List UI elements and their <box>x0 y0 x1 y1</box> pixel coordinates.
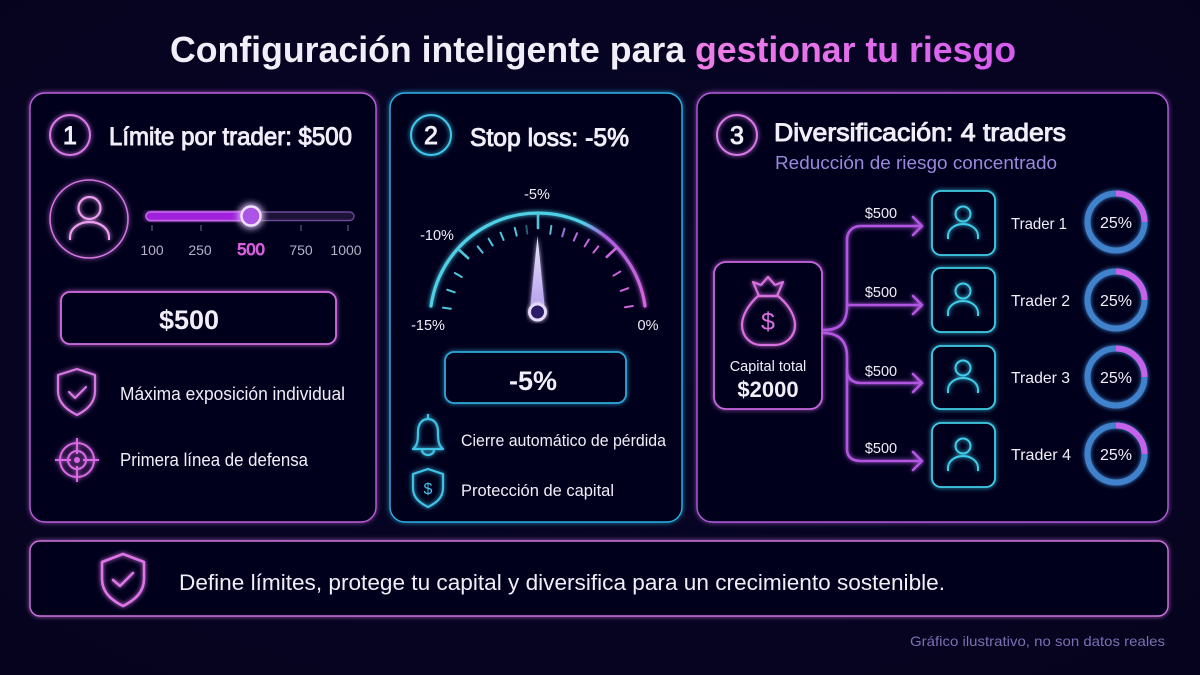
trader 3: 25% <box>1100 370 1132 387</box>
heading: stop loss: Stop loss: -5% <box>470 124 629 152</box>
step number 3: 3 <box>730 122 744 150</box>
text: primera línea: Primera línea de defensa <box>120 450 309 470</box>
icon: shield check <box>102 554 144 606</box>
step number 2 <box>411 115 451 155</box>
text: protección: Protección de capital <box>461 482 614 500</box>
flow arrows <box>823 217 922 470</box>
capital total box <box>714 262 822 409</box>
trader 2: 25% <box>1100 293 1132 310</box>
gauge <box>411 187 659 334</box>
capital total box: Capital total <box>730 359 806 375</box>
icon: shield check <box>58 369 95 415</box>
trader 1 <box>932 191 1144 255</box>
slider scale labels: 750 <box>289 242 313 258</box>
slider scale labels: 250 <box>188 242 212 258</box>
value box -5% <box>445 352 626 403</box>
gauge labels: -5% <box>524 187 550 203</box>
slider scale labels: 500 <box>237 241 265 259</box>
subheading: Reducción de riesgo concentrado <box>775 153 1057 173</box>
arrow amounts: $500 <box>865 285 897 301</box>
gauge labels: -15% <box>411 318 445 334</box>
panel: stop loss: $ <box>424 481 433 498</box>
icon: money bag <box>742 277 795 345</box>
capital total box: $2000 <box>737 377 799 402</box>
step number 2: 2 <box>424 122 438 150</box>
slider scale labels: 1000 <box>330 242 362 258</box>
slider <box>140 206 362 259</box>
slider scale labels <box>140 241 362 259</box>
trader 4: 25% <box>1100 447 1132 464</box>
value box $500: $500 <box>159 305 219 335</box>
trader 3 <box>932 346 1144 409</box>
slider scale labels: 100 <box>140 242 164 258</box>
capital total box: $ <box>761 308 775 336</box>
trader 4: Trader 4 <box>1011 447 1071 464</box>
panel: diversificación <box>697 93 1168 522</box>
trader 2 <box>932 268 1144 332</box>
trader 3: Trader 3 <box>1011 370 1070 387</box>
banner text: Define límites, protege tu capital y diversifica para un crecimiento sostenible. <box>179 570 945 595</box>
arrow amounts <box>865 206 897 457</box>
step number 1: 1 <box>63 122 77 150</box>
text: máxima exposición: Máxima exposición individual <box>120 384 345 404</box>
heading: límite: Límite por trader: $500 <box>109 123 352 151</box>
panel: stop loss <box>390 93 682 522</box>
step number 1 <box>50 115 90 155</box>
panel: límite por trader <box>30 93 376 522</box>
gauge labels: -10% <box>420 228 454 244</box>
needle <box>530 236 546 320</box>
trader 1: Trader 1 <box>1011 216 1067 233</box>
title: Configuración inteligente para gestionar tu riesgo <box>170 29 1016 70</box>
arrow amounts: $500 <box>865 206 897 222</box>
icon: user in circle <box>50 180 128 258</box>
heading: diversificación: Diversificación: 4 traders <box>774 119 1066 147</box>
trader 4 <box>932 423 1144 487</box>
step number 3 <box>717 115 757 155</box>
text: cierre automático: Cierre automático de pérdida <box>461 432 667 450</box>
arrow amounts: $500 <box>865 441 897 457</box>
gauge labels: 0% <box>638 318 659 334</box>
trader 1: 25% <box>1100 215 1132 232</box>
trader 2: Trader 2 <box>1011 293 1070 310</box>
footnote: Gráfico ilustrativo, no son datos reales <box>910 633 1165 649</box>
value box $500 <box>61 292 336 344</box>
icon: target <box>55 438 99 482</box>
gauge labels <box>411 187 659 334</box>
arrow amounts: $500 <box>865 364 897 380</box>
value box -5%: -5% <box>509 366 557 396</box>
icon: shield dollar <box>413 469 443 507</box>
icon: bell <box>413 414 443 455</box>
bottom banner <box>30 541 1168 616</box>
